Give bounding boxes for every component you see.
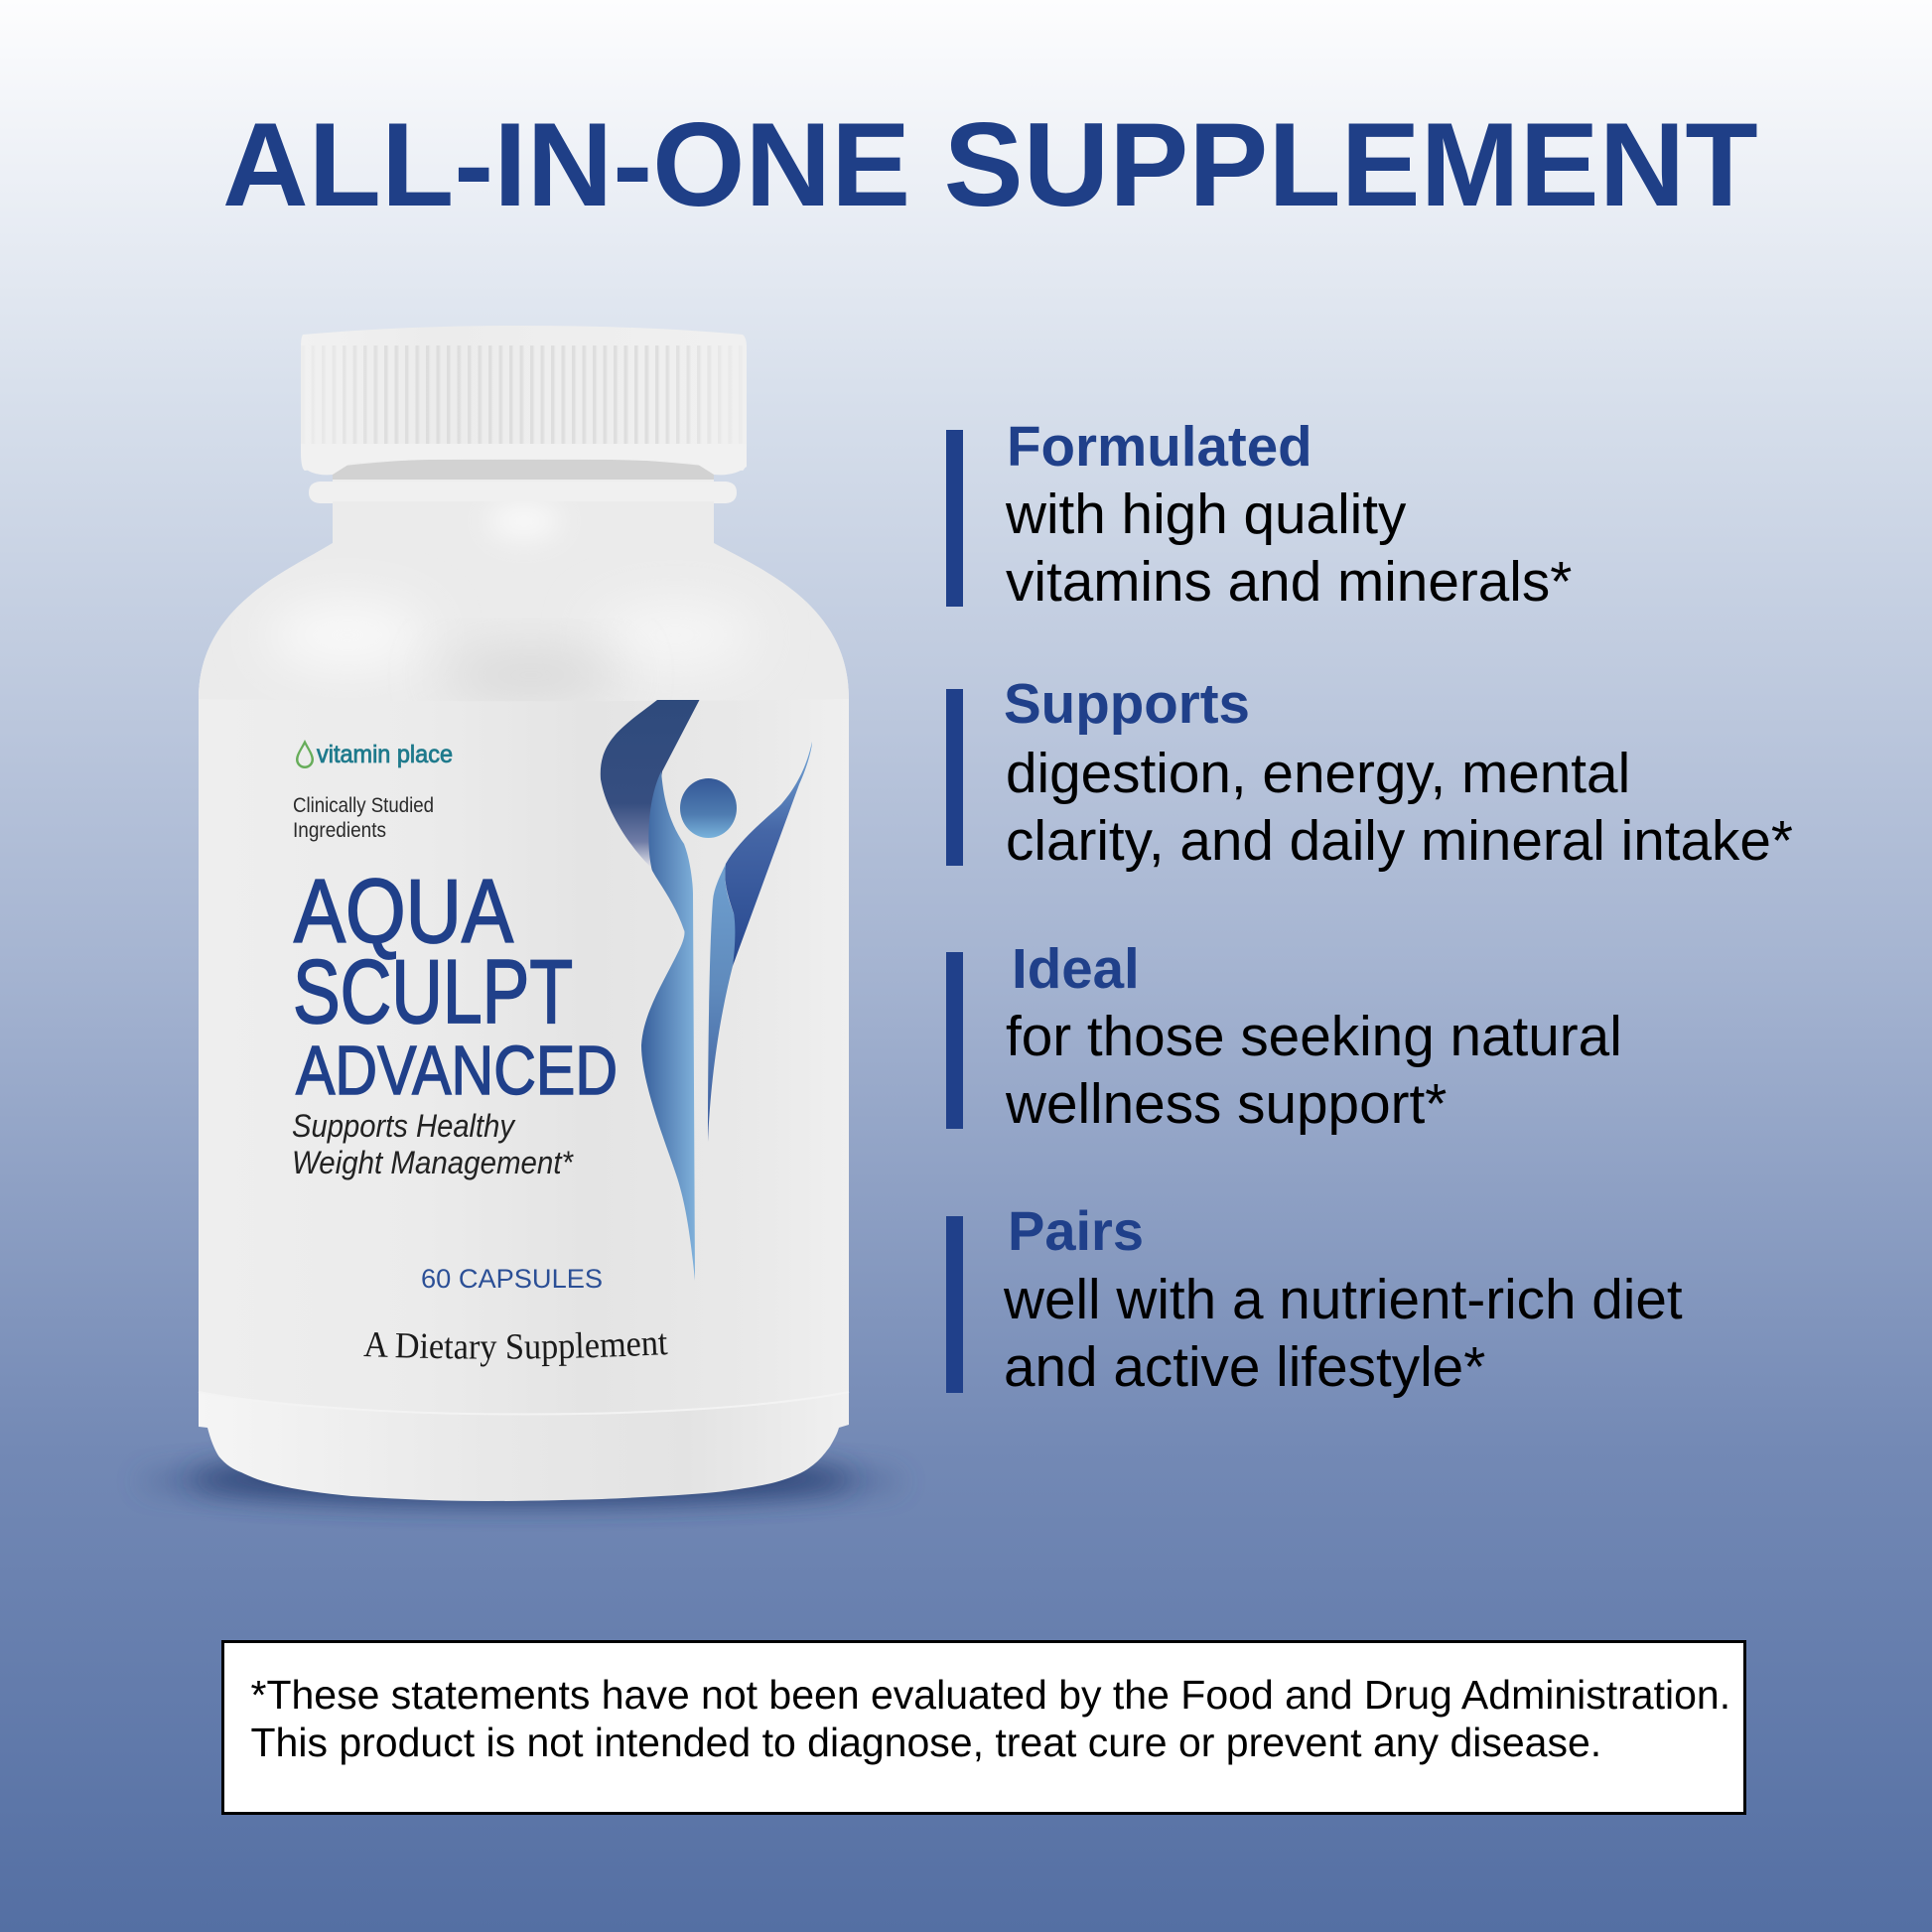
figure left ribbon bbox=[641, 771, 695, 1281]
feature: pairs: and active lifestyle* bbox=[1004, 1336, 1485, 1399]
figure swoosh bbox=[601, 700, 699, 867]
figure right arm bbox=[725, 742, 812, 966]
feature: ideal: wellness support* bbox=[1005, 1073, 1447, 1136]
feature text: well with a nutrient-rich diet bbox=[1003, 1269, 1683, 1331]
accent bar bbox=[946, 1216, 963, 1393]
base seam line bbox=[199, 1392, 849, 1414]
logo drop icon bbox=[296, 740, 314, 768]
feature: supports bbox=[946, 672, 1793, 873]
feature list bbox=[946, 415, 1793, 1399]
clinically studied text: Ingredients bbox=[293, 819, 386, 842]
figure right ribbon bbox=[708, 864, 735, 1142]
accent bar bbox=[946, 952, 963, 1129]
bottle flange bbox=[309, 482, 737, 503]
disclaimer text bbox=[250, 1672, 1730, 1765]
logo text: vitamin place bbox=[317, 741, 453, 768]
figure head bbox=[680, 778, 737, 838]
tagline: Weight Management* bbox=[292, 1145, 574, 1180]
bottle shoulder and body bbox=[199, 501, 849, 1501]
product name: AQUA bbox=[294, 862, 513, 962]
cap lip bbox=[301, 444, 747, 475]
clinically studied text bbox=[293, 794, 434, 842]
clinically studied text: Clinically Studied bbox=[293, 794, 434, 817]
feature heading: Ideal bbox=[1012, 937, 1140, 1000]
bottle shadow bbox=[139, 1457, 903, 1501]
feature text: for those seeking natural bbox=[1006, 1006, 1622, 1068]
shoulder shading bbox=[194, 501, 854, 705]
feature: ideal bbox=[946, 937, 1622, 1136]
label area bbox=[199, 699, 849, 1414]
tagline bbox=[292, 1108, 574, 1180]
bottle cap bbox=[301, 326, 747, 475]
figure logo bbox=[601, 700, 812, 1281]
product name: SCULPT bbox=[293, 942, 573, 1042]
bottle neck bbox=[333, 457, 714, 546]
title: ALL-IN-ONE SUPPLEMENT bbox=[222, 98, 1758, 231]
feature: supports: clarity, and daily mineral intake* bbox=[1006, 810, 1793, 873]
capsule count: 60 CAPSULES bbox=[421, 1264, 603, 1294]
feature heading: Pairs bbox=[1008, 1199, 1144, 1262]
feature heading: Formulated bbox=[1007, 415, 1312, 478]
neck gap bbox=[333, 460, 714, 480]
disclaimer text: *These statements have not been evaluated by the Food and Drug Administration. bbox=[250, 1672, 1730, 1718]
feature text: with high quality bbox=[1005, 483, 1407, 546]
disclaimer box bbox=[222, 1642, 1745, 1813]
feature: pairs bbox=[946, 1199, 1683, 1399]
cap ridges bbox=[333, 345, 719, 444]
feature heading: Supports bbox=[1004, 672, 1250, 735]
cap body bbox=[301, 326, 747, 471]
dietary supplement text: A Dietary Supplement bbox=[363, 1332, 668, 1366]
feature text: digestion, energy, mental bbox=[1006, 743, 1630, 805]
product name bbox=[293, 862, 618, 1109]
product name: ADVANCED bbox=[296, 1032, 618, 1109]
disclaimer text: This product is not intended to diagnose, treat cure or prevent any disease. bbox=[250, 1720, 1601, 1765]
feature: formulated bbox=[946, 415, 1572, 614]
accent bar bbox=[946, 689, 963, 866]
accent bar bbox=[946, 430, 963, 607]
product bottle bbox=[151, 326, 892, 1522]
feature: formulated: vitamins and minerals* bbox=[1006, 551, 1572, 614]
tagline: Supports Healthy bbox=[292, 1108, 516, 1144]
